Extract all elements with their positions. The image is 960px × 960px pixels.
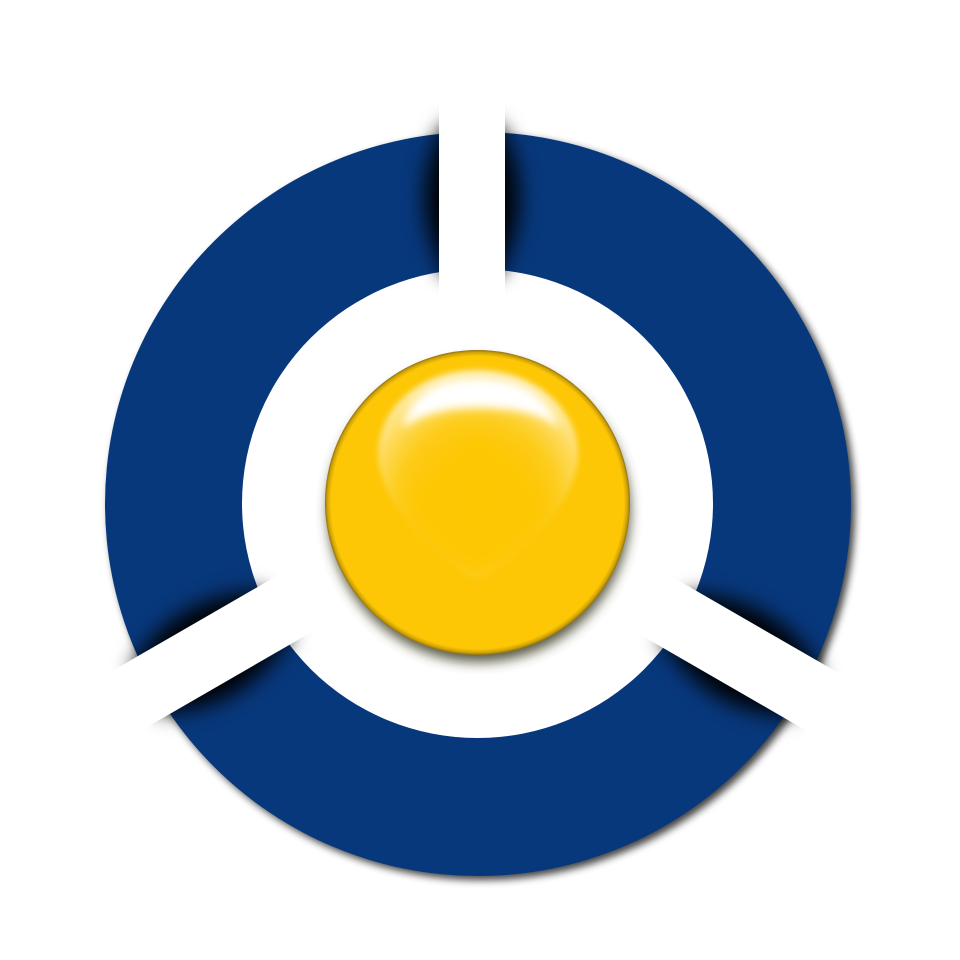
lower-left white arm bbox=[109, 574, 313, 730]
lower-left arm shadow bbox=[111, 567, 312, 737]
button disc bbox=[325, 350, 630, 655]
button shadow bbox=[328, 360, 630, 662]
gloss bright arch bbox=[402, 378, 560, 428]
white hole behind ring bbox=[178, 202, 778, 802]
lower-right arm shadow bbox=[641, 570, 841, 740]
yellow button bbox=[325, 350, 630, 662]
lower-right white arm bbox=[639, 577, 844, 733]
logo emblem bbox=[105, 100, 855, 880]
top white arm bbox=[439, 100, 505, 298]
blue ring bbox=[105, 132, 851, 876]
outer ring shadow bbox=[109, 136, 855, 880]
gloss inner core bbox=[408, 433, 550, 570]
top arm shadow bbox=[425, 111, 519, 288]
gloss highlight bbox=[378, 370, 578, 580]
